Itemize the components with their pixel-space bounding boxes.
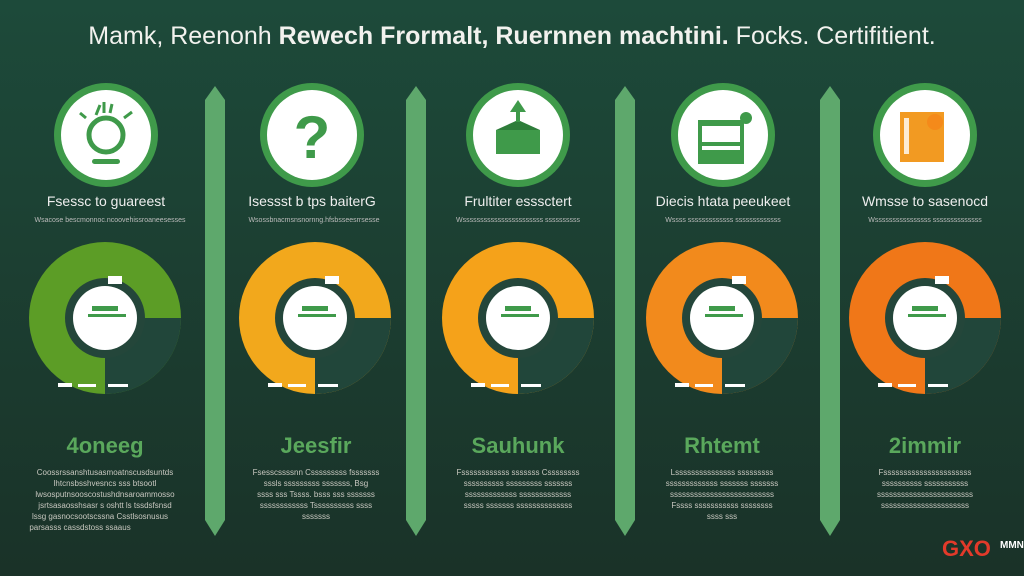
body 2: Fsesscssssnn Csssssssss fsssssss [253,468,379,477]
body 4: Fssss sssssssssss ssssssss [671,501,773,510]
body 4: ssss sss [707,512,737,521]
icon: box [466,83,570,187]
column 5 [849,83,1001,510]
chart: red-orange circle [849,242,1001,394]
body 1: lssg gasnocsootscssna Csstlsosnusus [32,512,168,521]
body 1: jsrtsasaosshsasr s oshtt ls tssdsfsnsd [37,501,172,510]
body 3: Fssssssssssss sssssss Cssssssss [456,468,580,477]
chart: deep orange circle [646,242,798,394]
body 1: parsasss cassdstoss ssaaus [29,523,131,532]
heading 2: Isessst b tps baiterG [248,193,376,209]
body 1 [29,468,175,532]
body 2: sssssss [302,512,330,521]
subtext 2: Wsossbnacmsnsnornng.hfsbsseesrrsesse [248,217,380,224]
chart: amber circle [239,242,391,394]
body 1: lhtcnsbsshvesncs sss btsootl [54,479,157,488]
icon: lightbulb [54,83,158,187]
subtext 5: Wssssssssssssssss ssssssssssssss [868,217,982,224]
arrow divider 3 [615,86,635,536]
body 1: lwsosputnsooscostushdnsaroammosso [35,490,175,499]
body 2: sssls sssssssss sssssss, Bsg [264,479,368,488]
logo: GXO [942,536,991,561]
column 4 [646,83,798,521]
heading 4: Diecis htata peeukeet [656,193,790,209]
body 3: ssssssssss sssssssss sssssss [464,479,572,488]
body 5: ssssssssssssssssssssssss [877,490,973,499]
body 4: Lsssssssssssssss sssssssss [671,468,773,477]
label 5: 2immir [889,433,962,458]
icon: question mark [260,83,364,187]
subtext 4: Wssss sssssssssssss sssssssssssss [665,217,781,224]
column 1 [29,83,186,532]
body 3 [456,468,580,510]
chart: orange circle [442,242,594,394]
label 2: Jeesfir [281,433,352,458]
heading 3: Frultiter esssctert [464,193,572,209]
arrow divider 2 [406,86,426,536]
body 3: sssssssssssss sssssssssssss [465,490,571,499]
heading 5: Wmsse to sasenocd [862,193,988,209]
body 5: ssssssssssssssssssssss [881,501,969,510]
column 3 [442,83,594,510]
body 5: Fssssssssssssssssssssss [879,468,971,477]
heading 1: Fsessc to guareest [47,193,165,209]
arrow divider 1 [205,86,225,536]
label 3: Sauhunk [472,433,565,458]
body 2 [253,468,379,521]
logo: MMN [1000,540,1024,551]
body 4: ssssssssssssssssssssssssss [670,490,774,499]
logo [942,536,1024,561]
icon: question mark: ? [294,104,330,171]
subtext 1: Wsacose bescmonnoc.ncoovehissroaneesesses [35,217,186,224]
label 1: 4oneeg [66,433,144,458]
arrow divider 4 [820,86,840,536]
chart: green circle [29,242,181,394]
body 4 [666,468,778,521]
body 1: Coossrssanshtusasmoatnscusdsuntds [37,468,173,477]
body 5: ssssssssss sssssssssss [882,479,968,488]
body 2: ssssssssssss Tssssssssss ssss [260,501,372,510]
label 4: Rhtemt [684,433,761,458]
body 2: ssss sss Tssss. bsss sss sssssss [257,490,375,499]
icon: orange document [873,83,977,187]
body 5 [877,468,973,510]
body 4: sssssssssssss sssssss sssssss [666,479,778,488]
title: Mamk, Reenonh Rewech Frormalt, Ruernnen machtini. Focks. Certifitient. [88,22,936,50]
column 2 [239,83,391,521]
body 3: sssss sssssss ssssssssssssss [464,501,572,510]
icon: certificate board [671,83,775,187]
subtext 3: Wsssssssssssssssssssssss ssssssssss [456,217,581,224]
